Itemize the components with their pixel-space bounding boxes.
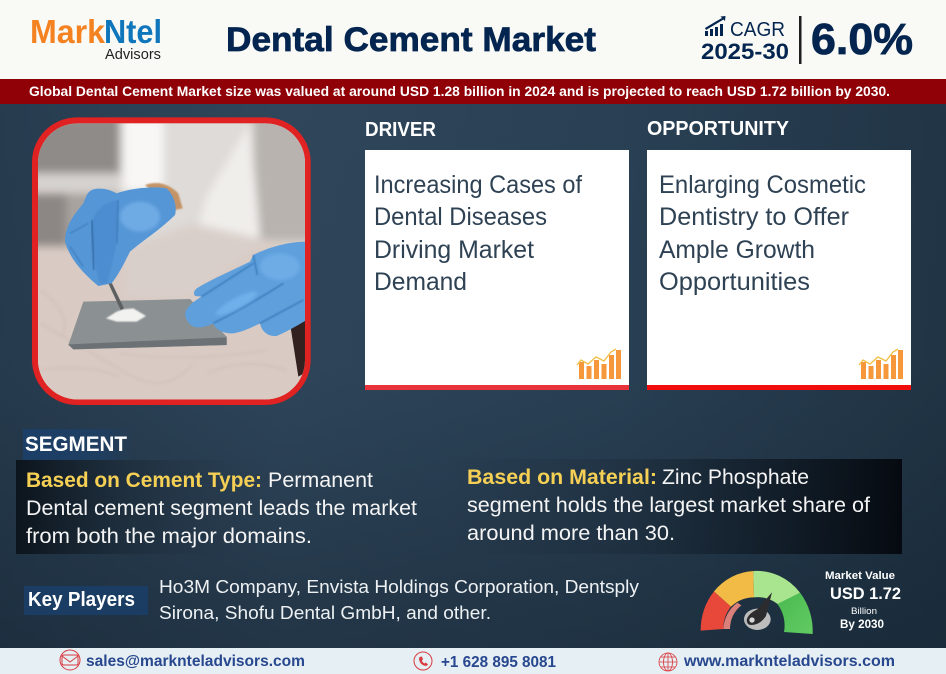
segment: material: Zinc Phosphate <box>662 466 809 489</box>
key players list: Ho3M Company, Envista Holdings Corporation, Dentsply <box>159 576 640 597</box>
driver text: Dental Diseases <box>374 203 547 231</box>
panel: driver <box>365 119 629 390</box>
segment: material <box>450 459 902 554</box>
icon: globe <box>659 653 677 671</box>
icon: envelope <box>60 650 80 670</box>
market value <box>825 570 901 631</box>
left glove <box>65 187 176 286</box>
opportunity card <box>647 150 911 390</box>
gauge <box>701 571 813 634</box>
logo <box>30 13 162 63</box>
driver text: Driving Market <box>374 236 534 264</box>
logo: Mark <box>30 13 106 50</box>
title: Dental Cement Market <box>226 21 596 59</box>
CAGR block: 6.0% <box>811 15 913 64</box>
footer band <box>0 648 946 674</box>
right glove <box>185 242 307 336</box>
key players list <box>159 576 640 623</box>
slab <box>68 299 227 349</box>
segment: cement type: Permanent <box>268 469 373 492</box>
driver text <box>374 171 582 296</box>
key players label: Key Players <box>28 589 135 611</box>
segment: material: Based on Material: <box>467 466 657 489</box>
photo: gloved hands mixing dental cement <box>30 117 313 407</box>
opportunity text: Opportunities <box>659 268 810 296</box>
segment: cement type: Based on Cement Type: <box>26 469 262 492</box>
header band <box>0 0 946 79</box>
contact: email: sales@marknteladvisors.com <box>86 653 305 670</box>
powder <box>106 308 146 322</box>
market value: By 2030 <box>840 619 884 631</box>
logo: Advisors <box>105 46 161 63</box>
segment: material: around more than 30. <box>467 522 675 545</box>
market value: USD 1.72 <box>830 584 901 603</box>
segment: cement type: Dental cement segment leads the market <box>26 497 417 520</box>
key players label <box>24 586 148 615</box>
panel: opportunity <box>647 118 911 390</box>
opportunity text: Enlarging Cosmetic <box>659 171 866 199</box>
icon: bar trend <box>577 349 621 379</box>
CAGR block: CAGR <box>730 19 785 41</box>
summary banner <box>0 79 946 104</box>
summary banner: Global Dental Cement Market size was valued at around USD 1.28 billion in 2024 and is projected to reach USD 1.72 billion by 2030. <box>29 84 890 99</box>
driver text: Increasing Cases of <box>374 171 582 199</box>
opportunity text: Dentistry to Offer <box>659 203 849 231</box>
CAGR block: 2025-30 <box>701 39 789 64</box>
CAGR block <box>701 15 913 64</box>
heading: opportunity: OPPORTUNITY <box>647 118 790 140</box>
icon: growth chart <box>705 16 726 36</box>
driver card <box>365 150 629 390</box>
contact: phone: +1 628 895 8081 <box>441 654 556 671</box>
spatula <box>108 283 124 310</box>
opportunity text: Ample Growth <box>659 236 815 264</box>
segment: material: segment holds the largest market share of <box>467 494 870 517</box>
opportunity text <box>659 171 866 296</box>
contact: website: www.marknteladvisors.com <box>683 653 895 670</box>
key players list: Sirona, Shofu Dental GmbH, and other. <box>159 602 491 623</box>
icon: phone <box>414 652 432 670</box>
segment heading: SEGMENT <box>25 433 127 456</box>
segment: cement type <box>16 460 446 554</box>
icon: bar trend <box>859 349 903 379</box>
driver text: Demand <box>374 268 467 296</box>
market value: Market Value <box>825 570 895 582</box>
segment: cement type: from both the major domains. <box>26 525 312 548</box>
heading: driver: DRIVER <box>365 119 437 141</box>
logo: Ntel <box>104 13 162 50</box>
cuff <box>145 183 183 210</box>
market value: Billion <box>851 606 877 617</box>
